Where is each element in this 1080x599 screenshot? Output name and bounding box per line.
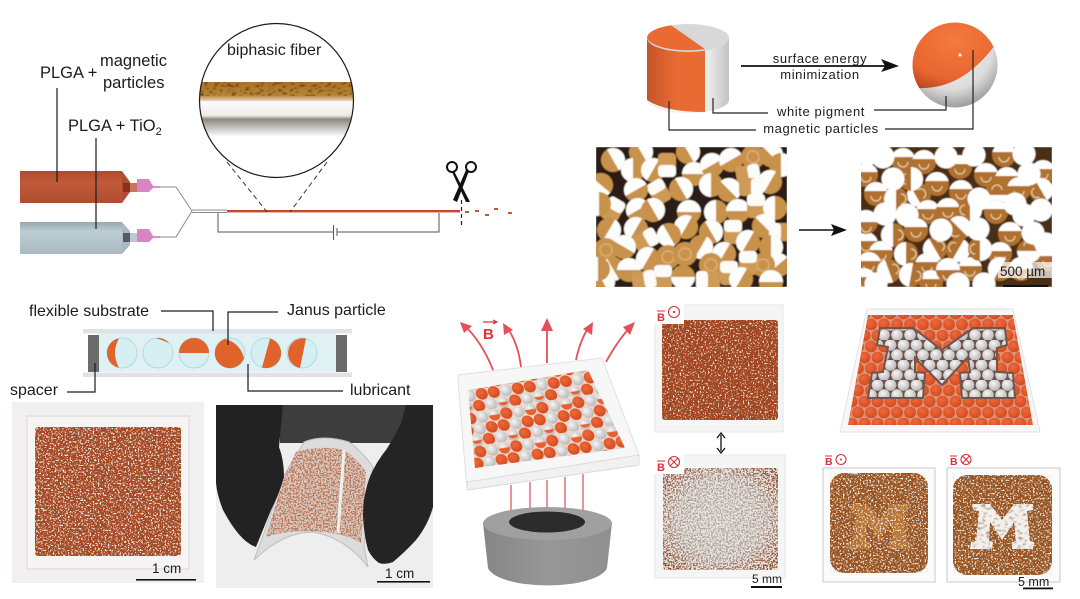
label: PLGA + magnetic particles: PLGA + (40, 64, 97, 82)
field lines from magnet (511, 474, 583, 521)
field arrows above the cell (464, 323, 632, 370)
label: spacer: spacer (10, 382, 59, 399)
icon: Janus cylinder (647, 24, 729, 113)
photo: cylindrical Janus particles (596, 147, 787, 287)
label: surface energy minimization: minimization (780, 67, 860, 82)
cutting line (460, 200, 462, 228)
photo: particles with field down (652, 454, 785, 588)
scale label: 1 cm: 1 cm (385, 566, 414, 581)
scale label: 5 mm: 5 mm (752, 572, 782, 586)
label: B field: B (483, 326, 494, 343)
scale label: 1 cm: 1 cm (152, 561, 181, 576)
icon: Janus sphere (912, 22, 998, 108)
arrow: surface energy minimization (741, 59, 899, 72)
label: Janus particle: Janus particle (287, 302, 386, 319)
label: B into plane: B (950, 456, 958, 468)
scale label: 500 µm (998, 262, 1052, 287)
panel: electrospinning of biphasic fiber (20, 24, 512, 254)
label: biphasic fiber: biphasic fiber (227, 42, 322, 59)
inset: magnified biphasic fiber (199, 24, 354, 178)
label: PLGA + magnetic particles: particles (103, 74, 164, 92)
leader lines (67, 311, 343, 392)
panel: device cross-section (10, 302, 411, 399)
syringe: red magnetic phase (20, 171, 160, 203)
label: surface energy minimization (773, 51, 867, 82)
circuit with voltage source (218, 213, 439, 240)
label: B field (483, 320, 497, 343)
cut fiber fragments (465, 208, 512, 216)
scale label: 500 µm: 500 µm (1000, 264, 1045, 279)
label: B out of plane: B (657, 312, 665, 324)
label: PLGA + TiO2: PLGA + TiO (68, 117, 156, 135)
biphasic fiber (227, 210, 460, 212)
film with particles (254, 438, 373, 567)
scale label: 1 cm (136, 561, 196, 581)
Janus spheres at six orientations (107, 338, 317, 368)
label: B out of plane: B (825, 456, 833, 468)
panel: M-patterned cell render (840, 309, 1040, 432)
white M pattern (970, 504, 1034, 549)
photo: M display with field down (947, 454, 1060, 589)
panel: magnetic actuation schematic (458, 318, 639, 585)
label: white pigment: white pigment (776, 104, 865, 119)
label: lubricant: lubricant (350, 382, 411, 399)
label: surface energy minimization: surface energy (773, 51, 867, 66)
panel: cylinder to sphere reshaping (596, 22, 1052, 287)
scale label: 1 cm (377, 566, 430, 583)
cell with mixed Janus particles (458, 358, 639, 490)
leader lines to pigment and particles (669, 50, 973, 130)
photo: particles with field up (652, 304, 783, 432)
label: PLGA + magnetic particles: magnetic (100, 52, 167, 70)
capillaries joining into nozzle (160, 187, 227, 237)
photo: flexed display held by gloved fingers (216, 405, 433, 588)
device: fluid cell with plates and spacers (83, 329, 352, 377)
leader lines to syringes (57, 88, 96, 229)
raised M of white particles (868, 328, 1015, 398)
photo: particle display top view (12, 402, 204, 583)
orange particle layer (848, 315, 1033, 425)
photo: M display with field up (823, 454, 935, 582)
scale label: 5 mm: 5 mm (1018, 575, 1049, 589)
faint M pattern (847, 504, 911, 549)
photo: spherical Janus particles (861, 147, 1052, 287)
gloved left finger (216, 405, 284, 547)
magnet (483, 507, 612, 585)
icon: scissors (447, 162, 476, 202)
label: flexible substrate: flexible substrate (29, 303, 149, 320)
label: magnetic particles: magnetic particles (763, 121, 879, 136)
zoom guide lines (227, 162, 327, 212)
label: PLGA + TiO2: 2 (156, 126, 162, 138)
label: PLGA + magnetic particles (40, 52, 167, 92)
arrow: particle reshaping (799, 224, 847, 236)
arrow: field reversal (717, 433, 725, 453)
label: B into plane: B (657, 462, 665, 474)
field arrow heads (460, 318, 635, 335)
gloved right finger (363, 405, 433, 564)
syringe: grey TiO2 phase (20, 222, 160, 254)
